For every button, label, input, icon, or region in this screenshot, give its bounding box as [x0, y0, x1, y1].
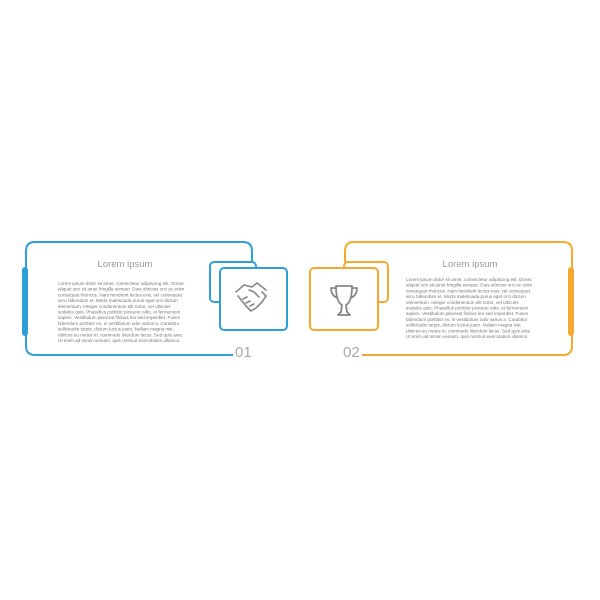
body text 01: arcu bibendum et. Morbi malesuada purus eget orci dictum: [58, 298, 178, 303]
body text 01: bibendum porttitor ex, in vestibulum odio varius a. Curabitur: [58, 321, 180, 326]
body text 01: ultrices eu metus in, commodo interdum lacus. Sed quis ante.: [58, 332, 183, 337]
body text 01: elementum. Integer condimentum elit tortor, vel ultricies: [58, 304, 171, 309]
body text 01: Lorem ipsum dolor sit amet, consectetur adipiscing elit. Donec: [58, 281, 185, 286]
body text 02: consequat rhoncus. Nam hendrerit lectus erat, vel consequat: [406, 288, 531, 293]
heading 01: Lorem ipsum: [98, 259, 153, 270]
icon: trophy: [331, 286, 357, 315]
number 01: 01: [235, 344, 252, 361]
body text 02: bibendum porttitor ex, in vestibulum odio varius a. Curabitur: [406, 317, 528, 322]
body text 01: sollicitudin turpis, dictum luctus justo. Nullam magna nisi,: [58, 327, 174, 332]
number 02: 02: [343, 344, 360, 361]
body text 01: aliquet orci sit amet fringilla semper. Duis ultricies orci ac enim: [58, 287, 185, 292]
body text 01: Ut enim ad minim veniam, quis nostrud exercitation ullamco.: [58, 338, 181, 343]
body text 02: aliquet orci sit amet fringilla semper. Duis ultricies orci ac enim: [406, 283, 533, 288]
body text 01: sapien. Vestibulum placerat finibus leo sed imperdiet. Fusce: [58, 315, 180, 320]
icon: handshake: [236, 283, 266, 311]
body text 01: [58, 281, 185, 343]
outer frame 01: [26, 242, 252, 355]
panel: step 02: [310, 242, 574, 361]
body text 01: consequat rhoncus. Nam hendrerit lectus erat, vel consequat: [58, 292, 183, 297]
body text 02: elementum. Integer condimentum elit tortor, vel ultricies: [406, 300, 519, 305]
body text 02: [406, 277, 533, 339]
panel: step 01: [22, 242, 287, 361]
body text 02: arcu bibendum et. Morbi malesuada purus eget orci dictum: [406, 294, 526, 299]
body text 02: sollicitudin turpis, dictum luctus justo. Nullam magna nisi,: [406, 323, 522, 328]
body text 02: Lorem ipsum dolor sit amet, consectetur adipiscing elit. Donec: [406, 277, 533, 282]
body text 02: sapien. Vestibulum placerat finibus leo sed imperdiet. Fusce: [406, 311, 528, 316]
back square 02: [344, 262, 388, 302]
heading 02: Lorem ipsum: [443, 259, 498, 270]
body text 02: Ut enim ad minim veniam, quis nostrud exercitation ullamco.: [406, 334, 529, 339]
accent bar blue: [22, 267, 28, 336]
icon box 02: [310, 268, 378, 330]
back square 01: [210, 262, 256, 302]
accent bar orange: [568, 267, 574, 336]
body text 02: ultrices eu metus in, commodo interdum lacus. Sed quis ante.: [406, 328, 531, 333]
outer frame 02: [345, 242, 572, 355]
icon box 01: [220, 268, 287, 330]
body text 01: sodales quis. Phasellus porttitor posuere odio, et fermentum: [58, 310, 180, 314]
body text 02: sodales quis. Phasellus porttitor posuere odio, et fermentum: [406, 306, 528, 310]
